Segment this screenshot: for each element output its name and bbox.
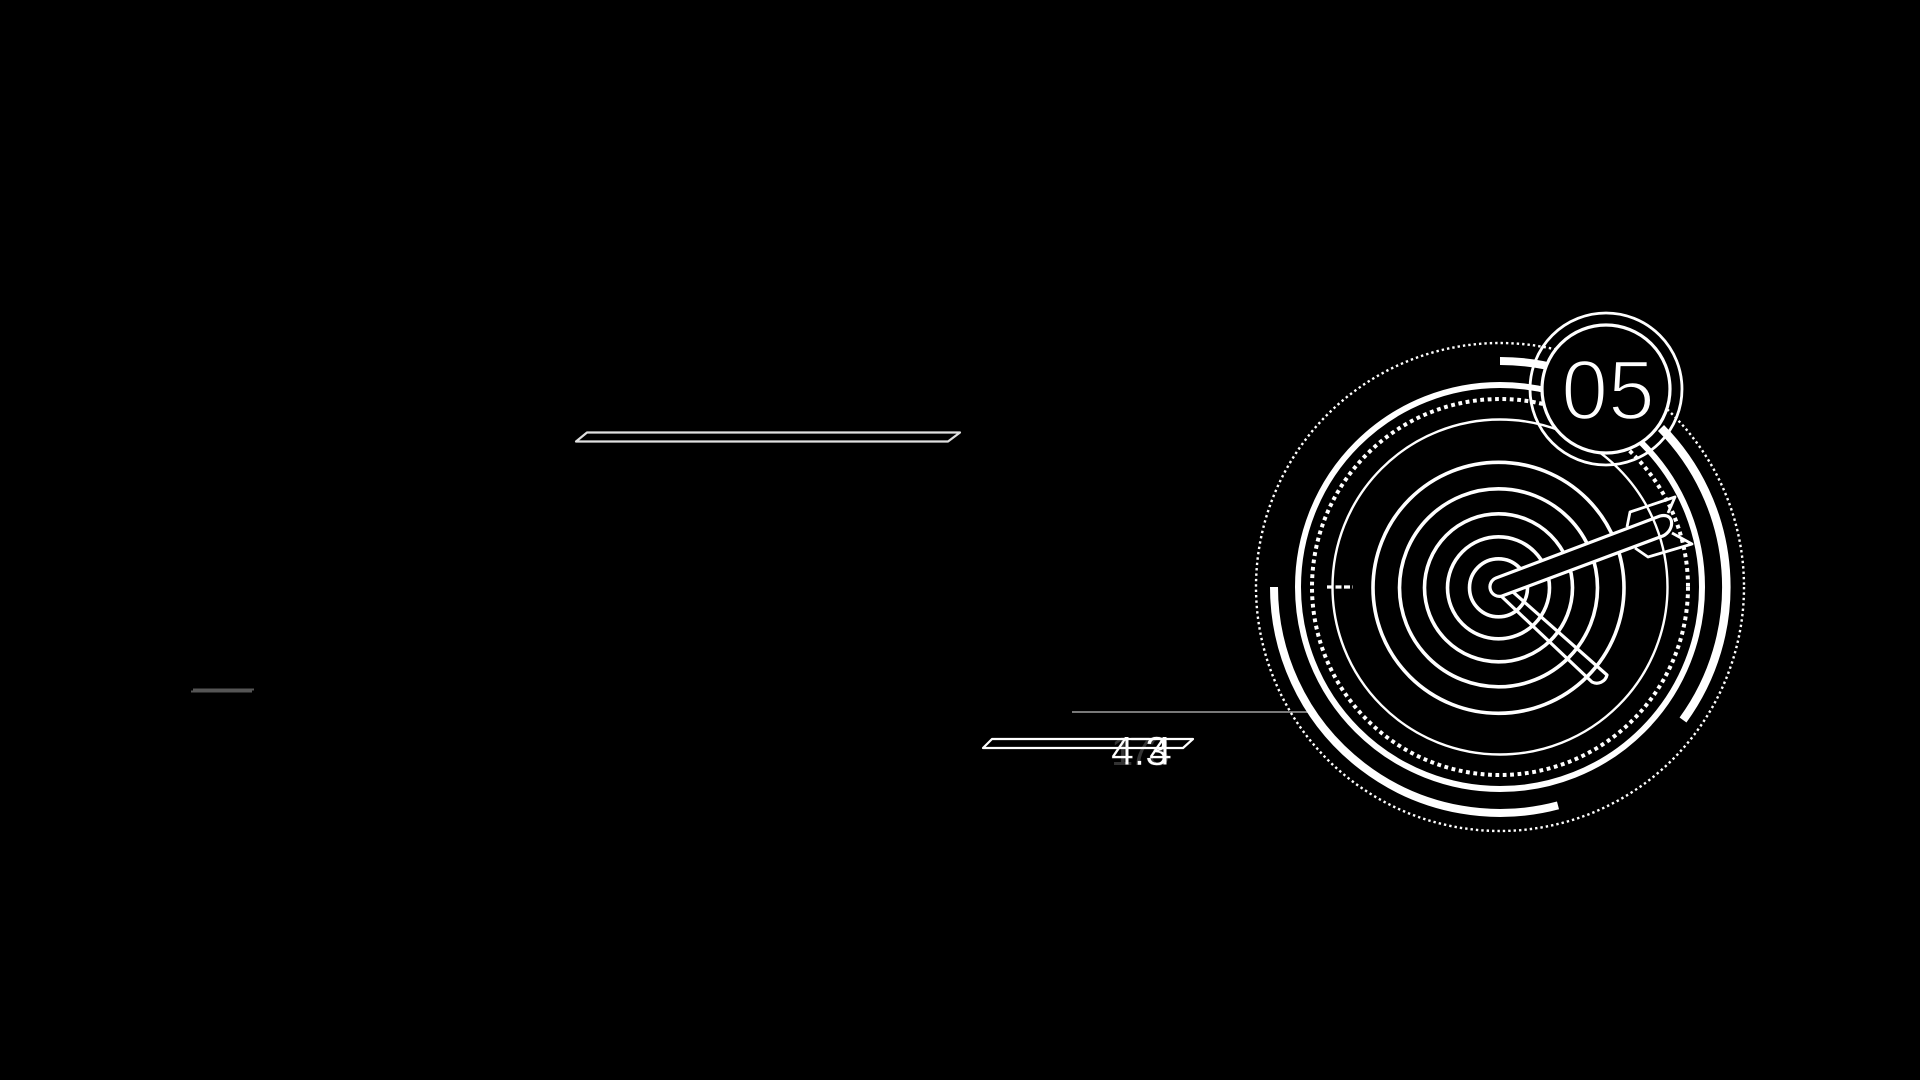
dashed ring	[1312, 399, 1688, 775]
outlined parallelogram bar top	[576, 432, 960, 442]
overlapping digit: 4	[1149, 728, 1172, 774]
connector line	[1072, 711, 1308, 713]
thick outer arc right	[1661, 428, 1726, 720]
faint number: 173	[1111, 730, 1168, 774]
badge outer ring	[1530, 313, 1682, 465]
short dashed tick	[1327, 585, 1353, 589]
outer dotted ring	[1256, 343, 1744, 831]
target rings	[1373, 462, 1624, 713]
overlapping number text	[1111, 728, 1172, 774]
arrow fletching lower	[1635, 533, 1692, 557]
badge number: 05	[1561, 343, 1655, 437]
arrow stick	[1500, 592, 1607, 683]
outlined parallelogram bar bottom	[983, 739, 1193, 748]
thin ring	[1332, 420, 1668, 754]
thick solid ring	[1298, 385, 1702, 789]
badge inner disc	[1542, 325, 1670, 453]
target dial	[1256, 313, 1744, 831]
arrow shaft	[1490, 515, 1672, 596]
thick outer arc top	[1500, 361, 1560, 369]
thick outer arc left and bottom	[1274, 587, 1558, 813]
bright number: 4.3	[1111, 728, 1168, 774]
faint flattened bar left	[191, 690, 254, 692]
arrow fletching upper	[1627, 497, 1675, 527]
